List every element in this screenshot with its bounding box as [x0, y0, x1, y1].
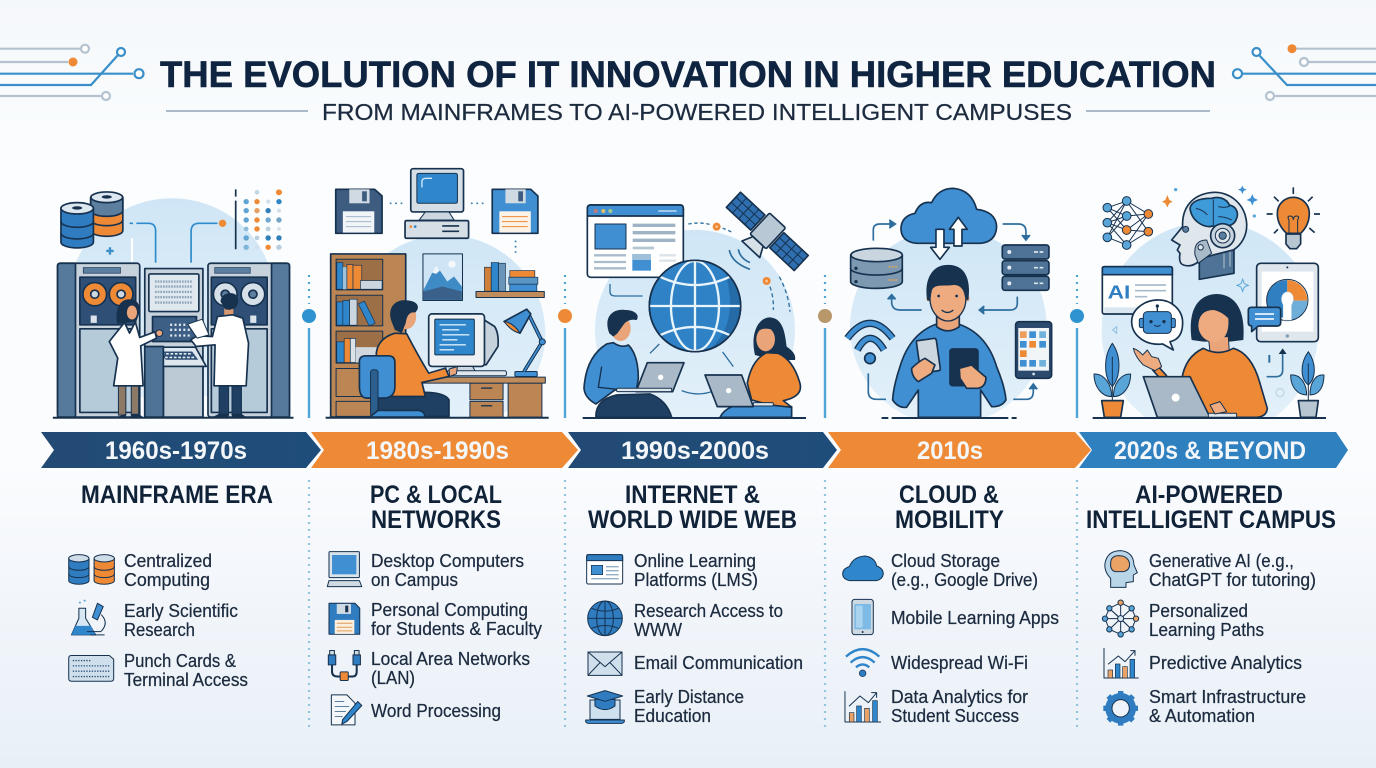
item: personalized learning: Personalized — [1149, 600, 1248, 621]
icon: browser window — [587, 205, 683, 277]
item: email: Email Communication — [634, 652, 803, 673]
icon: AI head with brain — [1172, 192, 1247, 279]
illustration: mainframe era — [53, 189, 294, 418]
era heading: cloud and mobility — [895, 481, 1004, 534]
item: desktop computers: on Campus — [371, 569, 458, 590]
era heading: internet and web: INTERNET & — [625, 481, 760, 509]
mainframe cabinet left — [58, 263, 140, 417]
item: cloud storage: (e.g., Google Drive) — [891, 569, 1038, 590]
list: internet and web — [586, 550, 803, 726]
icon: wifi — [847, 323, 893, 364]
plant left — [1094, 343, 1131, 417]
era 1 arrow: 1960s-1970s — [105, 437, 247, 465]
icon: floppy disks — [336, 189, 538, 255]
era 5 arrow — [1079, 432, 1348, 468]
student with laptop left — [584, 310, 684, 417]
item: data analytics — [845, 686, 1028, 726]
connecting paths — [610, 223, 790, 394]
era heading: internet and web: WORLD WIDE WEB — [588, 506, 797, 534]
illustration: PC and local networks — [326, 169, 549, 418]
item: data analytics: Student Success — [891, 705, 1019, 726]
era heading: internet and web — [588, 481, 797, 534]
icon: phone with apps — [1016, 322, 1052, 378]
circuit decoration right — [1233, 44, 1376, 100]
item: personalized learning: Learning Paths — [1149, 619, 1264, 640]
icon: AI browser window: AI — [1108, 282, 1130, 303]
item: centralized computing: Centralized — [124, 550, 212, 571]
person with phone and tablet — [893, 265, 1006, 417]
icon: neural network — [1103, 197, 1153, 249]
circuit decoration left — [0, 45, 144, 100]
connectors — [106, 220, 226, 263]
icon: AI browser window — [1102, 267, 1172, 314]
item: data analytics: Data Analytics for — [891, 686, 1028, 707]
illustration: internet and world wide web — [583, 189, 811, 418]
icon: desktop computer — [405, 169, 469, 238]
item: cloud storage: Cloud Storage — [891, 550, 1000, 571]
mainframe cabinet right — [208, 263, 289, 417]
era heading: PC and local networks — [370, 481, 502, 534]
item: local area networks: (LAN) — [371, 667, 415, 688]
era 3 arrow: 1990s-2000s — [621, 437, 769, 465]
item: cloud storage — [843, 550, 1038, 590]
illustration: cloud and mobility — [847, 188, 1052, 418]
item: punch cards: Punch Cards & — [124, 650, 237, 671]
item: local area networks: Local Area Networks — [371, 648, 530, 669]
woman with laptop — [1133, 294, 1267, 417]
list: cloud and mobility — [843, 550, 1059, 726]
icon: satellite — [717, 189, 811, 281]
item: research access: Research Access to — [634, 600, 783, 621]
floor — [326, 415, 549, 421]
student with laptop right — [705, 317, 800, 417]
item: predictive analytics: Predictive Analytics — [1149, 652, 1302, 673]
icon: tablet with gauge — [1257, 263, 1318, 342]
title: THE EVOLUTION OF IT INNOVATION IN HIGHER EDUCATION — [160, 53, 1216, 95]
bookcase — [331, 254, 406, 417]
floor — [1093, 415, 1326, 421]
sparkles — [1113, 186, 1284, 397]
data dots — [236, 189, 282, 250]
item: personal computing — [329, 599, 543, 639]
scientist woman — [109, 299, 163, 417]
item: local area networks — [328, 648, 530, 688]
list: mainframe era — [69, 550, 248, 690]
item: online learning platforms: Online Learning — [634, 550, 756, 571]
era heading: cloud and mobility: CLOUD & — [899, 481, 999, 509]
item: early distance education — [586, 686, 744, 726]
icon: light bulb — [1267, 187, 1320, 249]
desk lamp — [504, 309, 545, 376]
scientist man — [188, 293, 249, 417]
icon: server rack — [1002, 245, 1049, 290]
student at computer — [376, 300, 457, 416]
growth arrow — [1267, 348, 1287, 377]
list: AI powered campus — [1102, 550, 1316, 726]
era 1 arrow — [41, 432, 321, 468]
icon: database stack — [61, 192, 123, 248]
item: smart infrastructure — [1103, 686, 1306, 726]
item: online learning platforms: Platforms (LMS) — [634, 569, 758, 590]
item: centralized computing — [69, 550, 212, 590]
item: early distance education: Early Distance — [634, 686, 744, 707]
item: research access — [588, 600, 783, 640]
item: word processing — [331, 695, 501, 725]
chat bubble — [1248, 307, 1281, 332]
era 2 arrow — [311, 432, 578, 468]
framed picture — [423, 254, 462, 301]
floor — [882, 415, 1017, 421]
floor — [583, 415, 806, 421]
item: online learning platforms — [587, 550, 758, 590]
era heading: PC and local networks: NETWORKS — [371, 506, 501, 534]
floor — [53, 415, 294, 421]
item: punch cards: Terminal Access — [124, 669, 248, 690]
robot speech bubble — [1132, 300, 1183, 350]
subtitle: FROM MAINFRAMES TO AI-POWERED INTELLIGENT CAMPUSES — [322, 99, 1072, 125]
era 4 arrow — [828, 432, 1091, 468]
item: smart infrastructure: Smart Infrastructure — [1149, 686, 1306, 707]
era 2 arrow: 1980s-1990s — [366, 437, 509, 465]
icon: globe — [649, 260, 741, 352]
era 3 arrow — [568, 432, 837, 468]
item: early scientific research: Research — [124, 619, 195, 640]
item: research access: WWW — [634, 619, 682, 640]
era heading: AI powered campus: INTELLIGENT CAMPUS — [1086, 506, 1336, 534]
item: punch cards — [69, 650, 248, 690]
office chair — [359, 356, 425, 417]
item: word processing: Word Processing — [371, 700, 501, 721]
item: early scientific research: Early Scientific — [124, 600, 238, 621]
wall shelf with books — [476, 263, 544, 298]
era heading: mainframe era: MAINFRAME ERA — [81, 481, 273, 509]
era heading: AI powered campus: AI-POWERED — [1135, 481, 1283, 509]
item: generative AI: Generative AI (e.g., — [1149, 550, 1294, 571]
icon: cloud — [901, 188, 997, 259]
icon: database — [851, 248, 902, 288]
item: desktop computers: Desktop Computers — [371, 550, 524, 571]
timeline banner — [41, 432, 1348, 468]
crt monitor — [429, 314, 506, 376]
era 4 arrow: 2010s — [917, 437, 983, 465]
era heading: PC and local networks: PC & LOCAL — [370, 481, 502, 509]
list: PC and local networks — [327, 550, 543, 725]
mainframe console — [145, 269, 206, 417]
item: desktop computers — [327, 550, 524, 590]
item: personal computing: Personal Computing — [371, 599, 528, 620]
item: mobile apps: Mobile Learning Apps — [891, 607, 1059, 628]
item: predictive analytics — [1104, 648, 1302, 678]
item: personal computing: for Students & Faculty — [371, 618, 543, 639]
item: generative AI: ChatGPT for tutoring) — [1149, 569, 1316, 590]
desk — [409, 377, 545, 417]
item: mobile apps — [852, 599, 1059, 635]
era heading: cloud and mobility: MOBILITY — [895, 506, 1004, 534]
item: personalized learning — [1102, 600, 1264, 640]
item: email — [588, 652, 803, 675]
item: wifi: Widespread Wi-Fi — [891, 652, 1028, 673]
item: generative AI — [1105, 550, 1316, 590]
item: centralized computing: Computing — [124, 569, 210, 590]
item: early distance education: Education — [634, 705, 711, 726]
plant right — [1291, 352, 1324, 417]
item: early scientific research — [71, 600, 238, 640]
circular arrows — [868, 220, 1037, 399]
era 5 arrow: 2020s & BEYOND — [1114, 437, 1306, 465]
era heading: AI powered campus — [1086, 481, 1336, 534]
timeline dividers — [302, 275, 1084, 730]
illustration: AI powered intelligent campus — [1093, 186, 1326, 418]
item: wifi — [846, 649, 1028, 677]
item: smart infrastructure: & Automation — [1149, 705, 1255, 726]
